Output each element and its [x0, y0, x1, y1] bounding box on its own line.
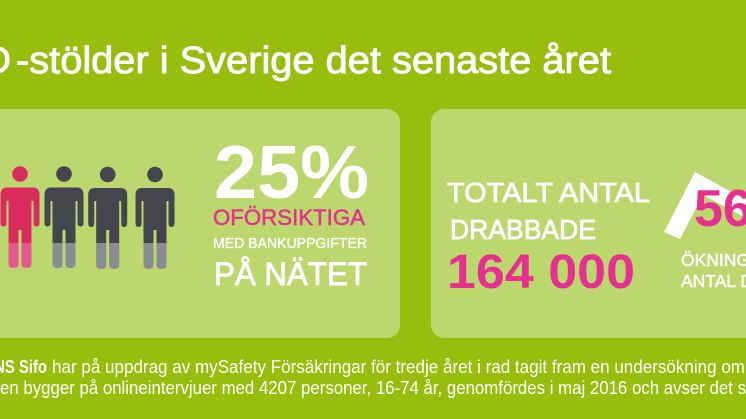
icon: upward arrow — [664, 172, 746, 239]
panel: careless online — [0, 109, 400, 338]
label: med bankuppgifter: MED BANKUPPGIFTER — [213, 235, 367, 252]
icon: four people — [0, 166, 174, 269]
label: oförsiktiga: OFÖRSIKTIGA — [213, 205, 365, 230]
icon: red person — [0, 166, 40, 268]
icon: dark person 4 — [136, 167, 174, 269]
title: -stölder i Sverige det senaste året — [16, 40, 611, 82]
label: drabbade: DRABBADE — [450, 214, 596, 245]
icon: dark person 3 — [88, 167, 127, 269]
footnote — [0, 357, 746, 398]
stat: 164 000: 164 000 — [447, 246, 635, 299]
panel: total affected — [431, 109, 746, 338]
label: totalt antal: TOTALT ANTAL — [447, 177, 650, 208]
icon: dark person 2 — [44, 166, 84, 268]
stat: 25%: 25% — [214, 130, 369, 214]
label: på nätet: PÅ NÄTET — [214, 256, 367, 292]
